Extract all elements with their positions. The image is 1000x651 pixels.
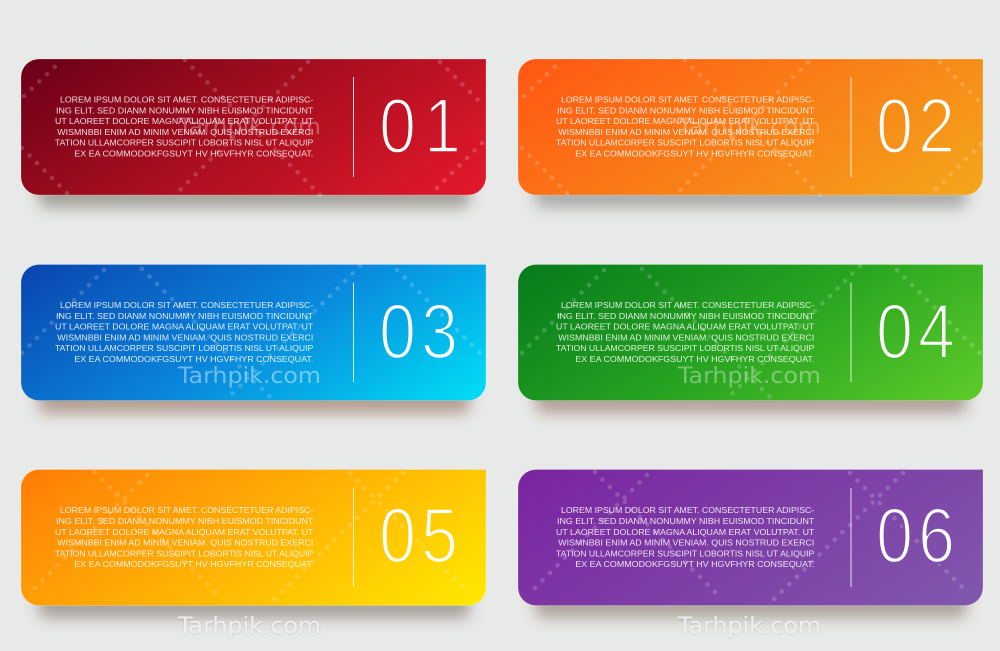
number 02: 02 (876, 82, 955, 170)
text block: WISMNBBI ENIM AD MINIM VENIAM. QUIS NOSTRUD EXERCI (558, 332, 814, 342)
text block: WISMNBBI ENIM AD MINIM VENIAM. QUIS NOSTRUD EXERCI (57, 538, 313, 548)
dotted lattice pattern (533, 472, 967, 603)
divider (850, 488, 852, 587)
text block (55, 94, 314, 158)
watermark: Tarhpik.com (177, 614, 321, 639)
panel: card 04 (518, 264, 983, 414)
text block: TATION ULLAMCORPER SUSCIPIT LOBORTIS NISL UT ALIQUIP (55, 548, 313, 558)
text block: ING ELIT. SED DIANM NONUMMY NIBH EUISMOD TINCIDUNT (557, 105, 815, 115)
text block: TATION ULLAMCORPER SUSCIPIT LOBORTIS NISL UT ALIQUIP (55, 343, 313, 353)
card shadow (38, 582, 470, 618)
panel: card 03 (21, 264, 486, 414)
card shadow (535, 172, 967, 208)
dotted lattice pattern (33, 472, 467, 603)
watermark: Tarhpik.com (677, 614, 821, 639)
text block (55, 505, 314, 569)
card shadow (38, 378, 470, 414)
panel: card 05 (21, 470, 486, 639)
watermark: Tarhpik.com (177, 364, 321, 389)
panel: card 06 (518, 470, 983, 639)
text block: ING ELIT. SED DIANM NONUMMY NIBH EUISMOD TINCIDUNT (557, 311, 815, 321)
card background (21, 264, 486, 400)
text block: UT LAOREET DOLORE MAGNA ALIQUAM ERAT VOLUTPAT. UT (556, 116, 815, 126)
card shadow (535, 582, 967, 618)
card background (21, 59, 486, 195)
divider (352, 282, 354, 382)
text block: WISMNBBI ENIM AD MINIM VENIAM. QUIS NOSTRUD EXERCI (558, 538, 814, 548)
text block: ING ELIT. SED DIANM NONUMMY NIBH EUISMOD TINCIDUNT (56, 516, 314, 526)
text block: EX EA COMMODOKFGSUYT HV HGVFHYR CONSEQUAT. (575, 354, 814, 364)
panel: card 02 (518, 59, 983, 208)
text block: EX EA COMMODOKFGSUYT HV HGVFHYR CONSEQUAT. (74, 559, 313, 569)
card background (518, 264, 983, 400)
text block: LOREM IPSUM DOLOR SIT AMET. CONSECTETUER ADIPISC- (60, 505, 313, 515)
card background (518, 470, 983, 606)
text block: LOREM IPSUM DOLOR SIT AMET. CONSECTETUER ADIPISC- (60, 94, 313, 104)
card background (21, 470, 486, 606)
text block (556, 505, 815, 569)
text block: TATION ULLAMCORPER SUSCIPIT LOBORTIS NISL UT ALIQUIP (556, 548, 814, 558)
dotted lattice pattern (522, 60, 981, 195)
text block: UT LAOREET DOLORE MAGNA ALIQUAM ERAT VOLUTPAT. UT (556, 322, 815, 332)
text block: EX EA COMMODOKFGSUYT HV HGVFHYR CONSEQUAT. (575, 559, 814, 569)
text block: UT LAOREET DOLORE MAGNA ALIQUAM ERAT VOLUTPAT. UT (556, 527, 815, 537)
text block: LOREM IPSUM DOLOR SIT AMET. CONSECTETUER ADIPISC- (561, 300, 814, 310)
text block: LOREM IPSUM DOLOR SIT AMET. CONSECTETUER ADIPISC- (561, 94, 814, 104)
text block: LOREM IPSUM DOLOR SIT AMET. CONSECTETUER ADIPISC- (561, 505, 814, 515)
text block: WISMNBBI ENIM AD MINIM VENIAM. QUIS NOSTRUD EXERCI (558, 127, 814, 137)
number 03: 03 (379, 288, 458, 375)
dotted lattice pattern (522, 266, 981, 397)
text block: TATION ULLAMCORPER SUSCIPIT LOBORTIS NISL UT ALIQUIP (556, 138, 814, 148)
watermark: Tarhpik.com (677, 115, 821, 140)
watermark: Tarhpik.com (677, 364, 821, 389)
divider (850, 282, 852, 382)
text block: ING ELIT. SED DIANM NONUMMY NIBH EUISMOD TINCIDUNT (56, 311, 314, 321)
divider (352, 488, 354, 587)
text block: EX EA COMMODOKFGSUYT HV HGVFHYR CONSEQUAT. (74, 354, 313, 364)
text block (55, 300, 314, 364)
number 05: 05 (379, 492, 458, 579)
text block: WISMNBBI ENIM AD MINIM VENIAM. QUIS NOSTRUD EXERCI (57, 127, 313, 137)
text block: ING ELIT. SED DIANM NONUMMY NIBH EUISMOD TINCIDUNT (557, 516, 815, 526)
text block: EX EA COMMODOKFGSUYT HV HGVFHYR CONSEQUAT. (575, 148, 814, 158)
number 01: 01 (379, 82, 461, 170)
text block: EX EA COMMODOKFGSUYT HV HGVFHYR CONSEQUAT. (74, 148, 313, 158)
panel: card 01 (21, 59, 486, 208)
divider (850, 77, 852, 177)
dotted lattice pattern (22, 266, 483, 397)
number 04: 04 (876, 288, 955, 375)
text block: UT LAOREET DOLORE MAGNA ALIQUAM ERAT VOLUTPAT. UT (55, 322, 314, 332)
text block: UT LAOREET DOLORE MAGNA ALIQUAM ERAT VOLUTPAT. UT (55, 116, 314, 126)
text block (556, 94, 815, 158)
divider (352, 77, 354, 177)
text block (556, 300, 815, 364)
text block: UT LAOREET DOLORE MAGNA ALIQUAM ERAT VOLUTPAT. UT (55, 527, 314, 537)
number 06: 06 (876, 492, 955, 579)
text block: TATION ULLAMCORPER SUSCIPIT LOBORTIS NISL UT ALIQUIP (556, 343, 814, 353)
text block: TATION ULLAMCORPER SUSCIPIT LOBORTIS NISL UT ALIQUIP (55, 138, 313, 148)
text block: ING ELIT. SED DIANM NONUMMY NIBH EUISMOD TINCIDUNT (56, 105, 314, 115)
text block: LOREM IPSUM DOLOR SIT AMET. CONSECTETUER ADIPISC- (60, 300, 313, 310)
dotted lattice pattern (22, 60, 482, 195)
text block: WISMNBBI ENIM AD MINIM VENIAM. QUIS NOSTRUD EXERCI (57, 332, 313, 342)
card shadow (38, 172, 470, 208)
card shadow (535, 378, 967, 414)
watermark: Tarhpik.com (177, 115, 321, 140)
card background (518, 59, 983, 195)
